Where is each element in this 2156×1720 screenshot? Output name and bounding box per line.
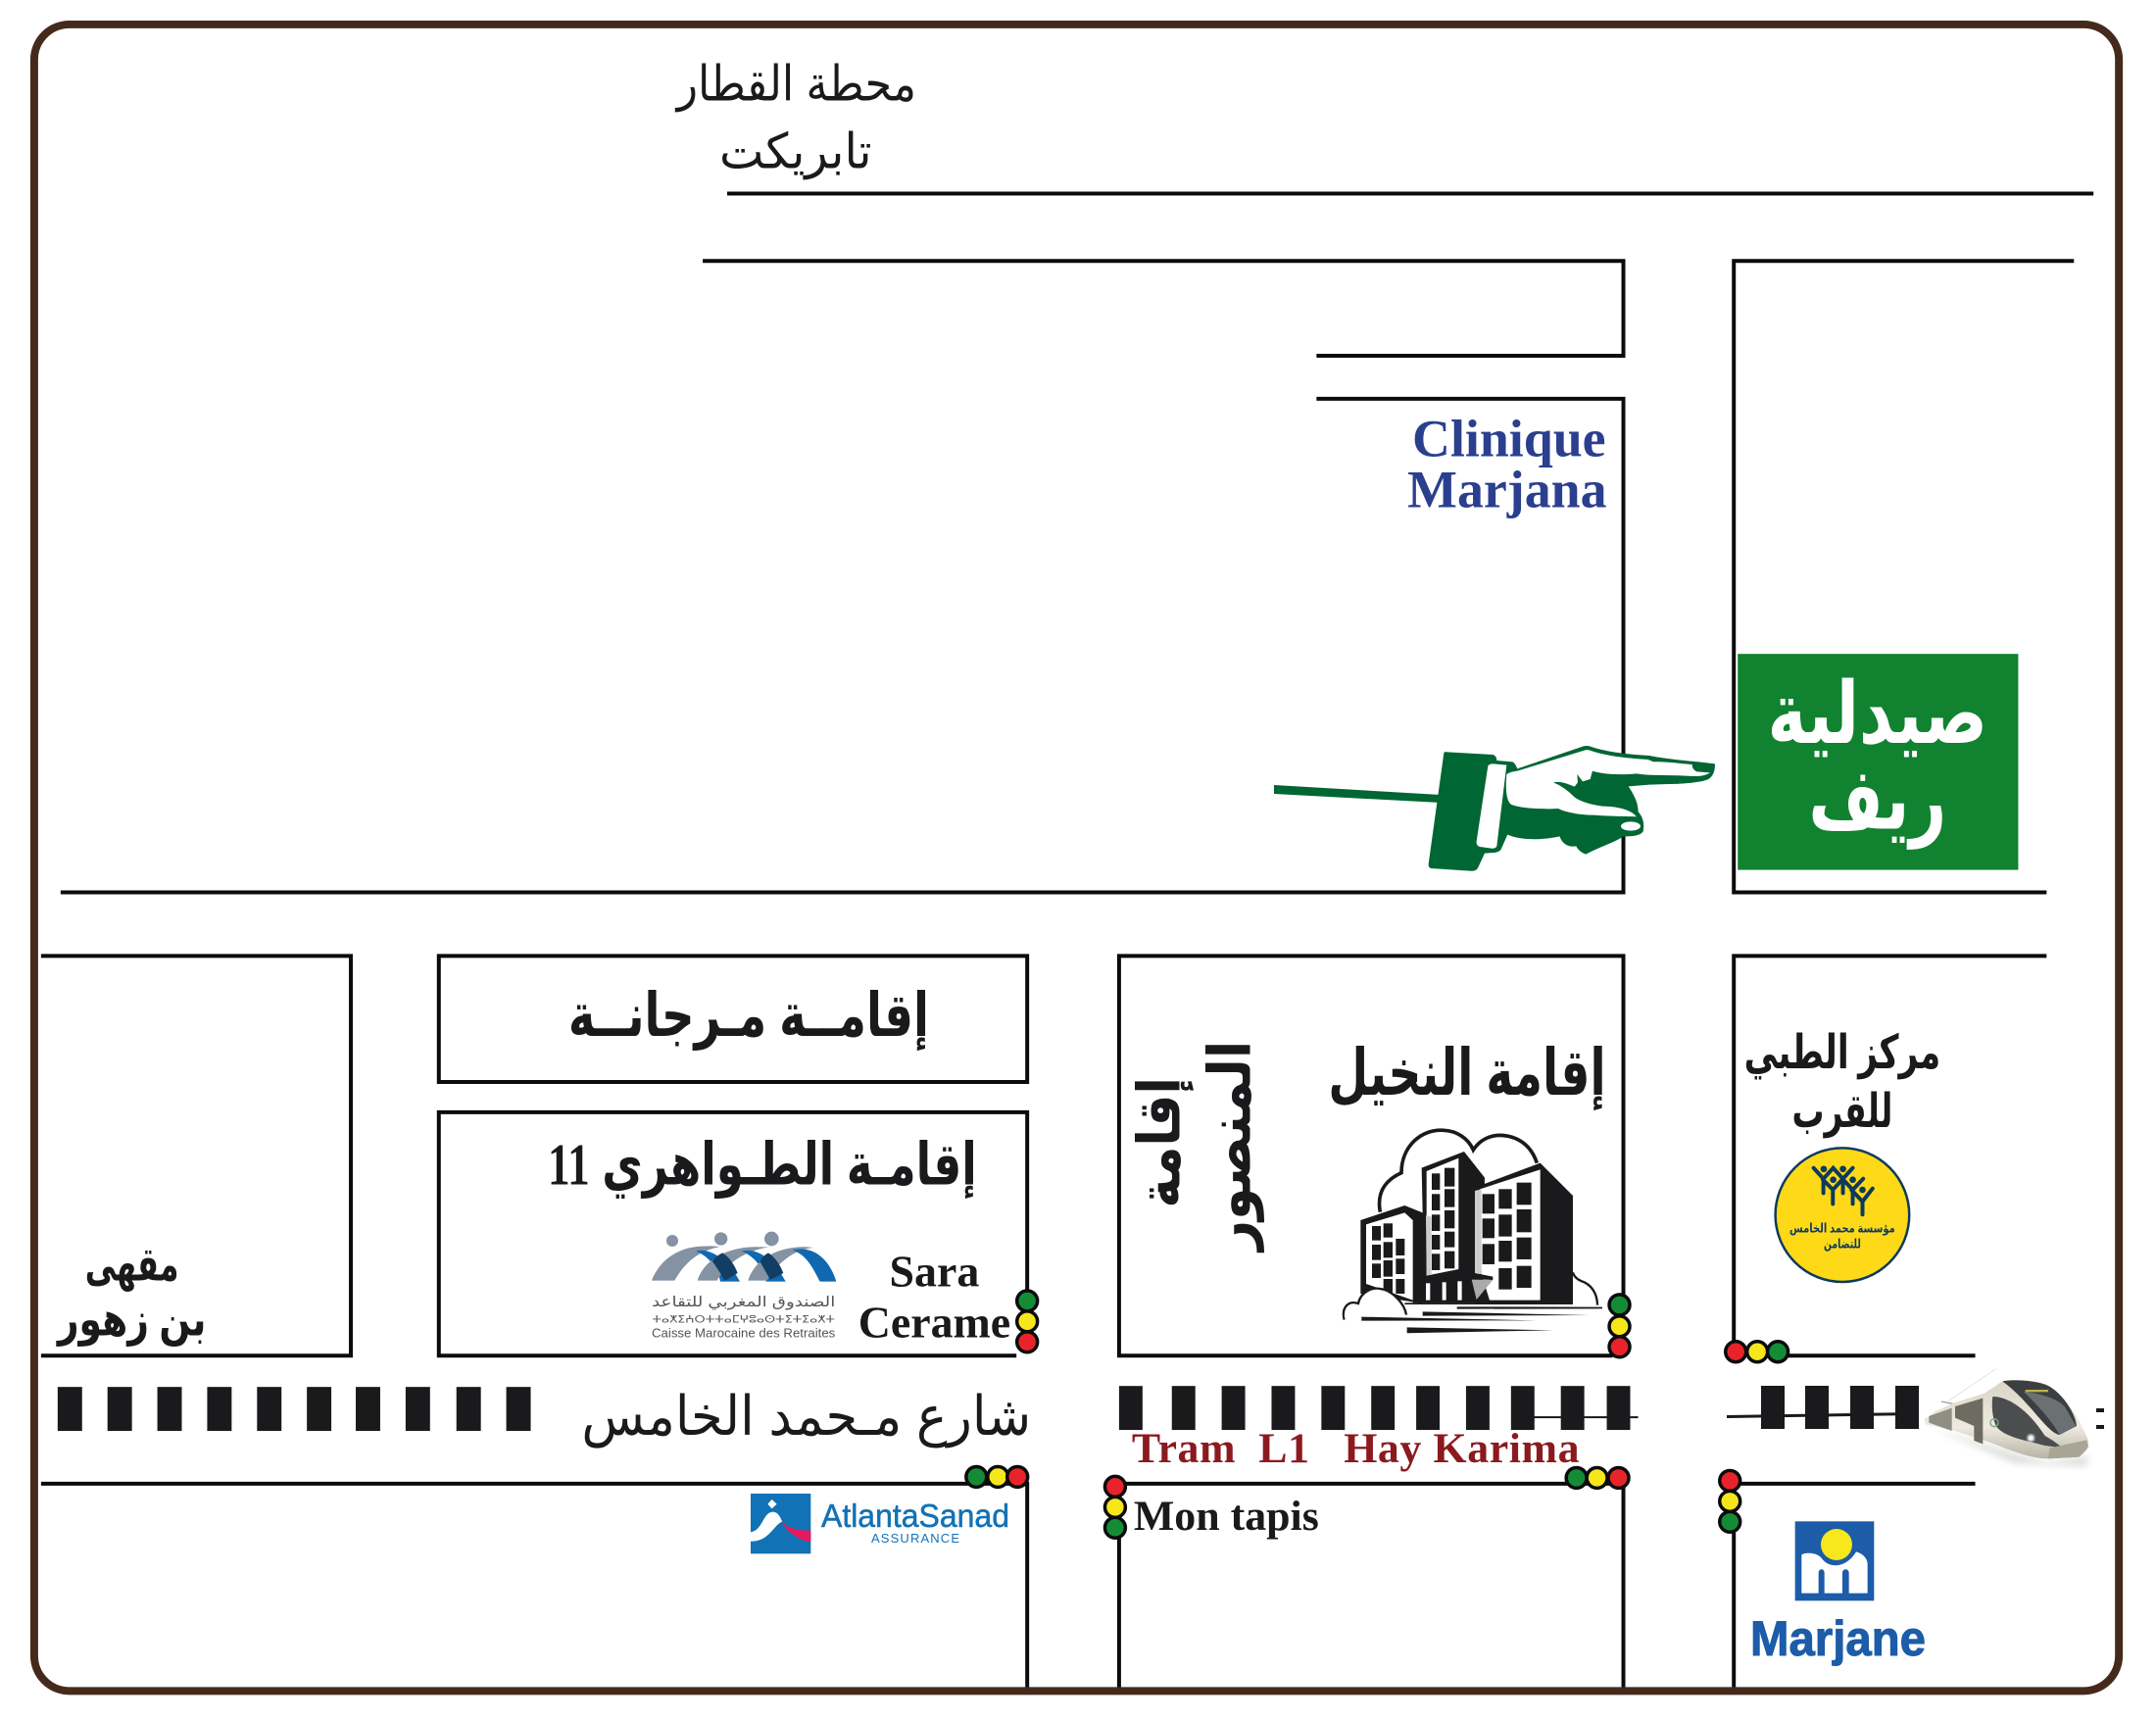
Residence Marjana label: إقامــة مـرجانــة [568, 982, 929, 1051]
logo: Caisse Marocaine des Retraites: ⵜⴰⵅⵉⵄⵔⵜⵜⴰⵎⵖⵓⴰⵙⵜⵉⵜⵉⴰⵅⵜ [652, 1315, 835, 1326]
Mohammed V avenue label: شارع مـحمد الخامس [581, 1385, 1031, 1449]
logo: Mohammed V Foundation [1776, 1148, 1909, 1282]
Medical center nearby label: للقرب [1792, 1086, 1892, 1139]
Clinique Marjana label: Clinique [1412, 410, 1606, 468]
Sara Cerame label [858, 1246, 1010, 1347]
Medical center nearby label: مركز الطبي [1744, 1027, 1940, 1080]
train station label: محطة القطار [674, 57, 916, 113]
tram rail right segment [1727, 1386, 1919, 1429]
pharmacy sign [1738, 654, 2018, 870]
logo: Marjane: Marjane [1750, 1611, 1926, 1666]
logo: Caisse Marocaine des Retraites [652, 1232, 836, 1340]
pharmacy sign: ريف [1809, 752, 1946, 850]
icon: building [1344, 1130, 1602, 1333]
traffic light: Hay Karima corner [1566, 1467, 1629, 1488]
logo: Mohammed V Foundation: للتضامن [1824, 1237, 1861, 1252]
traffic light: Marjane corner [1720, 1470, 1740, 1532]
Residence Al Nakhil label: إقامة النخيل [1328, 1036, 1606, 1111]
Residence Al Mansour rotated label: المنصور [1198, 1041, 1265, 1253]
traffic light: Mon tapis corner [1104, 1476, 1125, 1538]
traffic light: medical center corner [1726, 1342, 1788, 1362]
train station label: تابريكت [719, 124, 872, 180]
train station label [674, 57, 916, 180]
Mon tapis label: Mon tapis [1134, 1493, 1319, 1540]
tram rail middle segment [1119, 1386, 1638, 1430]
tram rail left segment [58, 1387, 531, 1431]
logo: AtlantaSanad Assurance: AtlantaSanad [821, 1498, 1009, 1534]
logo: Mohammed V Foundation: مؤسسة محمد الخامس [1789, 1221, 1895, 1236]
logo: Caisse Marocaine des Retraites: Caisse Marocaine des Retraites [652, 1326, 835, 1340]
Cafe Ben Zohour label [56, 1239, 206, 1347]
Sara Cerame label: Sara [890, 1246, 979, 1296]
Residence Tawahiri 11 label: إقامـة الطـواهري 11 [548, 1132, 977, 1200]
Tram L1 Hay Karima label: Tram L1 Hay Karima [1132, 1425, 1580, 1472]
Cafe Ben Zohour label: مقهى [85, 1239, 179, 1292]
icon: pointing hand [1274, 746, 1715, 871]
pharmacy sign: صيدلية [1768, 665, 1987, 762]
Medical center nearby label [1744, 1027, 1940, 1139]
logo: AtlantaSanad Assurance: ASSURANCE [871, 1531, 959, 1546]
logo: Marjane [1750, 1521, 1926, 1666]
traffic light: AtlantaSanad corner [966, 1466, 1028, 1487]
logo: AtlantaSanad Assurance [751, 1494, 1009, 1553]
icon: tram [1924, 1369, 2089, 1467]
Sara Cerame label: Cerame [858, 1297, 1010, 1347]
logo: Caisse Marocaine des Retraites: الصندوق المغربي للتقاعد [652, 1295, 835, 1310]
Residence Al Mansour rotated label: إقامة [1127, 1077, 1195, 1208]
traffic light: Sara Cerame corner [1017, 1291, 1038, 1352]
colon marks [2096, 1408, 2104, 1429]
Clinique Marjana label [1407, 410, 1607, 519]
Clinique Marjana label: Marjana [1407, 461, 1607, 519]
Residence Al Mansour rotated label [1127, 1041, 1265, 1253]
Cafe Ben Zohour label: بن زهور [56, 1294, 206, 1347]
traffic light: building corner [1609, 1295, 1630, 1357]
